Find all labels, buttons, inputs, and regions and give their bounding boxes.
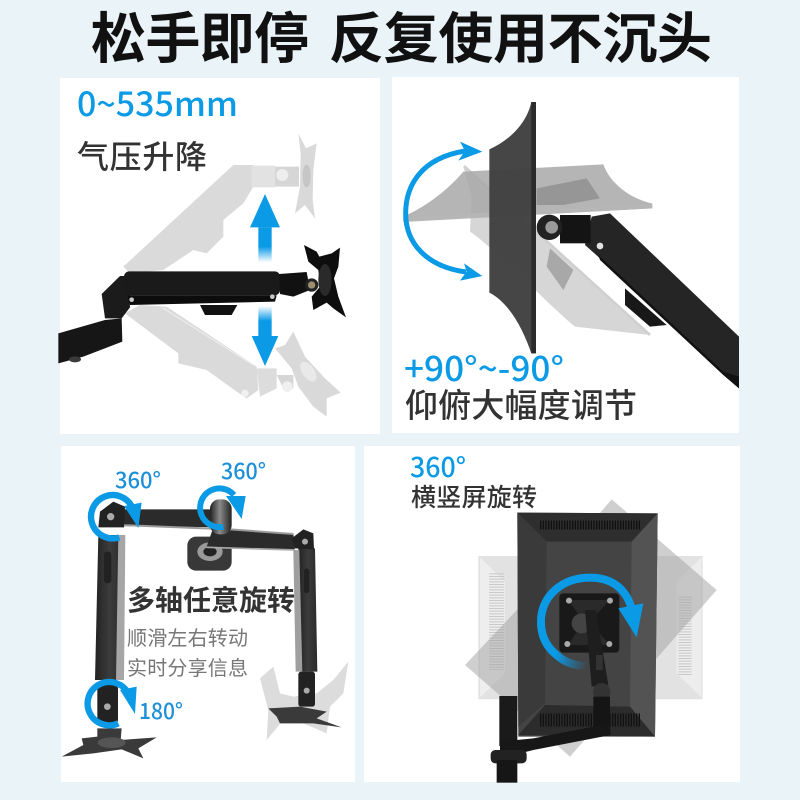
rotation description: 顺滑左右转动	[127, 622, 248, 651]
panel: tilt	[392, 77, 739, 433]
panel: lift	[58, 78, 380, 434]
arrow: down	[252, 306, 278, 366]
illustration: gas spring arm in three positions	[58, 133, 346, 417]
panel: portrait landscape rotation	[364, 446, 740, 783]
panel background	[61, 446, 355, 782]
lift caption: 气压升降	[77, 132, 207, 178]
arrow: tilt arc	[406, 142, 482, 281]
arrow: rotate monitor	[541, 578, 643, 666]
illustration: tilting monitor	[403, 102, 739, 388]
rotation range label: 360°	[410, 446, 466, 485]
rotation heading: 多轴任意旋转	[127, 579, 295, 619]
panel: multi-axis rotation	[61, 446, 355, 782]
arrow: rotate top-left	[91, 495, 142, 538]
tilt range label: +90°~-90°	[404, 342, 564, 391]
label: 360 left: 360°	[115, 463, 161, 495]
panel background	[364, 446, 740, 782]
illustration: rotating monitor	[465, 499, 717, 783]
rotation description	[127, 622, 248, 681]
label: 180: 180°	[139, 694, 183, 726]
illustration: folding arm	[62, 488, 348, 758]
panel background	[60, 78, 380, 434]
arrow: up	[250, 194, 280, 262]
rotation caption: 横竖屏旋转	[411, 478, 537, 514]
label: 360 centre: 360°	[221, 454, 266, 486]
panel background	[392, 77, 739, 433]
tilt caption: 仰俯大幅度调节	[405, 379, 637, 427]
rotation description: 实时分享信息	[127, 652, 248, 681]
title	[91, 0, 712, 74]
range label: 0~535mm	[77, 78, 238, 126]
arrow: rotate top-centre	[200, 488, 246, 527]
arrow: rotate bottom-left	[88, 682, 137, 725]
